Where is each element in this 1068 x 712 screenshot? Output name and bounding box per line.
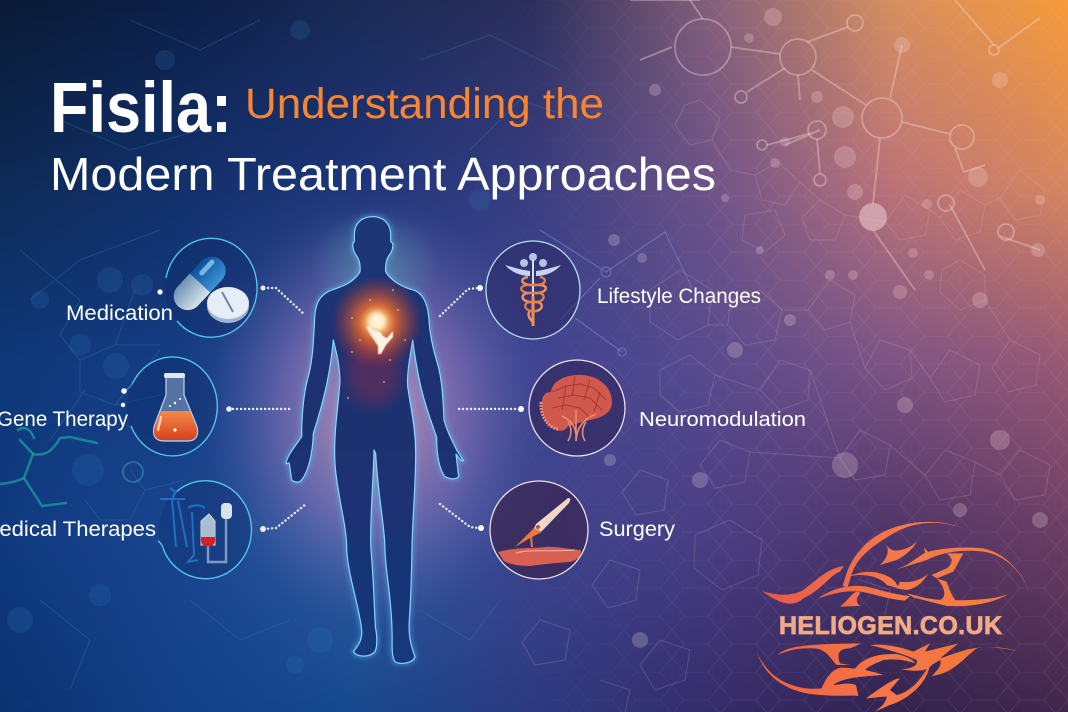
connector: surgery	[440, 504, 484, 531]
icon: flask	[154, 373, 198, 441]
ring	[529, 360, 625, 456]
label: Surgery: Surgery	[599, 518, 676, 541]
ring	[486, 241, 580, 339]
connector: medication	[260, 286, 305, 315]
title: Modern Treatment Approaches: Modern Treatment Approaches	[50, 148, 716, 200]
label: Medication: Medication	[66, 302, 173, 325]
body silhouette	[286, 217, 463, 663]
human body figure	[205, 200, 545, 663]
icon: pills	[168, 251, 249, 323]
aura behind body	[205, 200, 545, 630]
blue lines centre right	[540, 230, 692, 356]
connector: lifestyle changes	[440, 285, 483, 316]
node: gene therapy	[0, 357, 217, 456]
glow core	[369, 313, 385, 329]
left side blurred nodes	[7, 20, 491, 674]
small hexagon chains	[522, 100, 1050, 712]
left side network lines	[20, 20, 580, 690]
ring	[490, 481, 588, 579]
teal molecule bottom left	[0, 428, 143, 506]
node: surgery	[490, 481, 676, 579]
icon: medical instruments and IV bag	[160, 488, 232, 562]
logo: upper tribal flames	[762, 522, 1032, 607]
node: medication	[66, 238, 257, 337]
chest red haze	[347, 333, 400, 407]
heart spark shape	[366, 326, 393, 354]
node: medical therapies	[0, 481, 251, 579]
node: neuromodulation	[529, 360, 806, 456]
label: Neuromodulation: Neuromodulation	[639, 409, 806, 431]
teal glow near the neck	[310, 210, 440, 320]
particles	[347, 289, 406, 399]
logo: lower tribal flames	[757, 643, 1017, 712]
icon: scalpel on tissue	[498, 498, 581, 566]
connector: gene therapy	[226, 406, 290, 412]
ring	[158, 481, 251, 579]
title	[50, 69, 716, 200]
logo: heliogen.co.uk	[757, 522, 1032, 712]
translucent nodes	[604, 8, 1048, 648]
connector: medical therapies	[260, 504, 306, 532]
logo: site name: HELIOGEN.CO.UK	[779, 612, 1002, 640]
icon: caduceus	[505, 253, 561, 326]
top right large rings	[630, 0, 1040, 290]
node: lifestyle changes	[486, 241, 761, 339]
connector: neuromodulation	[459, 406, 524, 412]
icon: brain with tree	[541, 375, 612, 441]
ring	[157, 238, 257, 337]
body glow	[286, 217, 463, 663]
heart glow	[331, 276, 423, 368]
title: Understanding the: Understanding the	[245, 80, 604, 128]
title word: Fisila: Fisila:	[50, 69, 232, 148]
label: Lifestyle Changes: Lifestyle Changes	[597, 285, 761, 308]
ring	[121, 357, 217, 456]
label: Gene Therapy: Gene Therapy	[0, 408, 128, 431]
